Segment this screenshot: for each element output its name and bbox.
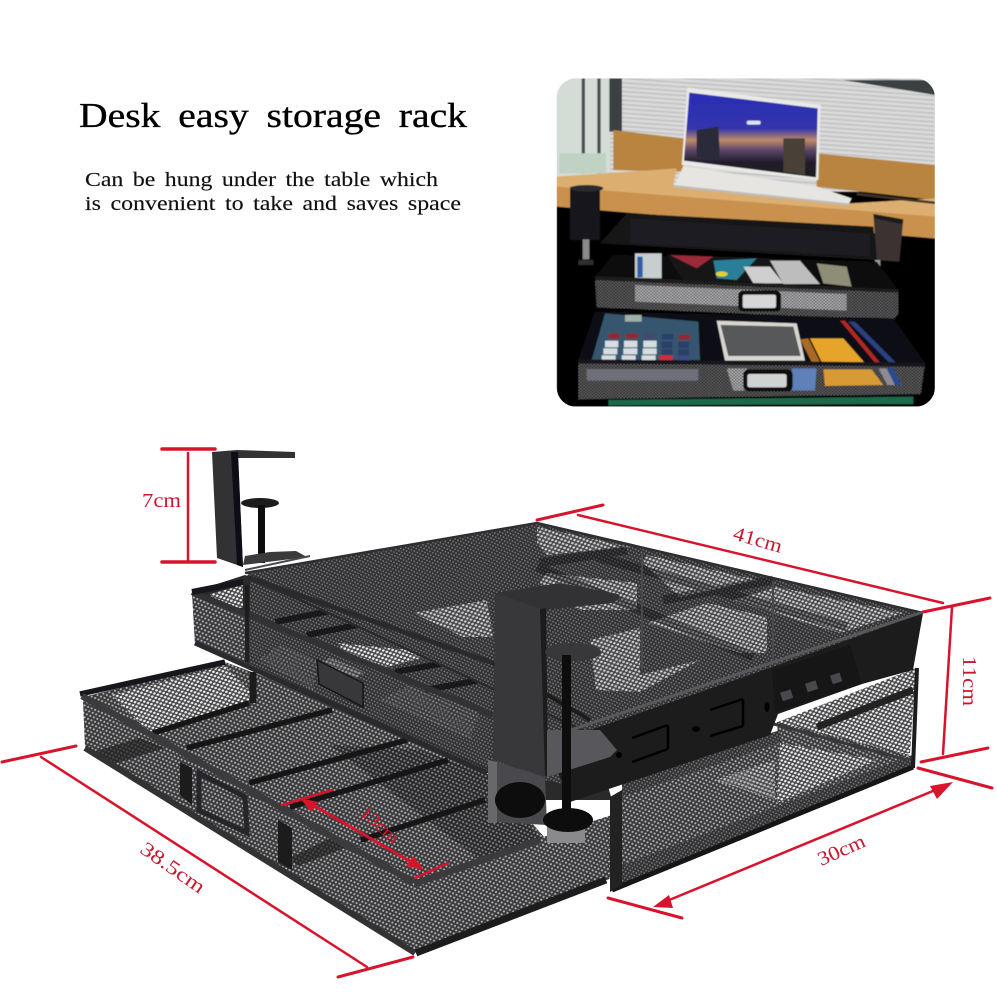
interior straps <box>153 703 485 840</box>
top mesh plate <box>245 523 923 735</box>
right clamp in photo <box>873 214 903 275</box>
slide holes <box>780 673 842 701</box>
desk top <box>557 168 935 238</box>
photo: rack mounted under a desk <box>557 78 935 407</box>
front clamp <box>488 583 620 843</box>
back clamp <box>212 450 310 570</box>
right side mesh wall <box>610 668 917 892</box>
dimension 30cm lines <box>608 768 992 918</box>
silver tray <box>717 321 805 361</box>
upper drawer <box>192 575 612 800</box>
inner rail <box>247 577 493 663</box>
upper drawer rims <box>192 592 493 715</box>
wood wall panels <box>613 130 935 200</box>
lower drawer floor and interior <box>80 662 545 882</box>
product illustration: under-desk storage rack <box>80 450 923 953</box>
notebook and pens <box>810 338 864 362</box>
upper drawer handle <box>738 291 781 311</box>
lower drawer right side mesh <box>413 815 612 953</box>
lower drawer front mesh <box>82 696 606 953</box>
laptop <box>674 87 852 205</box>
see-through floor patches <box>337 643 440 667</box>
clamp knobs <box>495 762 593 843</box>
rack mesh under desk <box>600 213 877 260</box>
dimension 7cm lines <box>162 449 215 562</box>
lower drawer <box>578 312 925 399</box>
label 38.5cm: 38.5cm <box>136 838 210 899</box>
upper drawer <box>595 253 898 321</box>
subtitle text block: Can be hung under the table which <box>85 169 438 191</box>
label 11cm: 11cm <box>958 656 980 706</box>
label 41cm: 41cm <box>731 523 785 558</box>
dimension 13cm lines <box>282 790 448 878</box>
subtitle text block <box>85 169 461 215</box>
dimension 41cm lines <box>537 505 990 612</box>
office background with blinds <box>557 78 935 192</box>
dimension 38.5cm lines <box>2 746 413 977</box>
rims <box>82 696 413 882</box>
dimension annotations <box>2 449 992 977</box>
upper drawer front mesh <box>192 592 245 664</box>
subtitle text block: is convenient to take and saves space <box>85 193 461 215</box>
back clamp in photo <box>570 185 603 265</box>
green desk edge <box>608 397 913 405</box>
calculator keys <box>602 333 690 361</box>
lower drawer handle <box>743 369 793 391</box>
dimension 11cm lines <box>921 607 988 762</box>
label 7cm: 7cm <box>142 490 181 512</box>
title: Desk easy storage rack <box>79 96 468 135</box>
lower drawer handle <box>199 773 247 833</box>
label 13cm: 13cm <box>356 802 403 847</box>
label 30cm: 30cm <box>814 830 869 871</box>
side rail with slide <box>547 612 923 802</box>
